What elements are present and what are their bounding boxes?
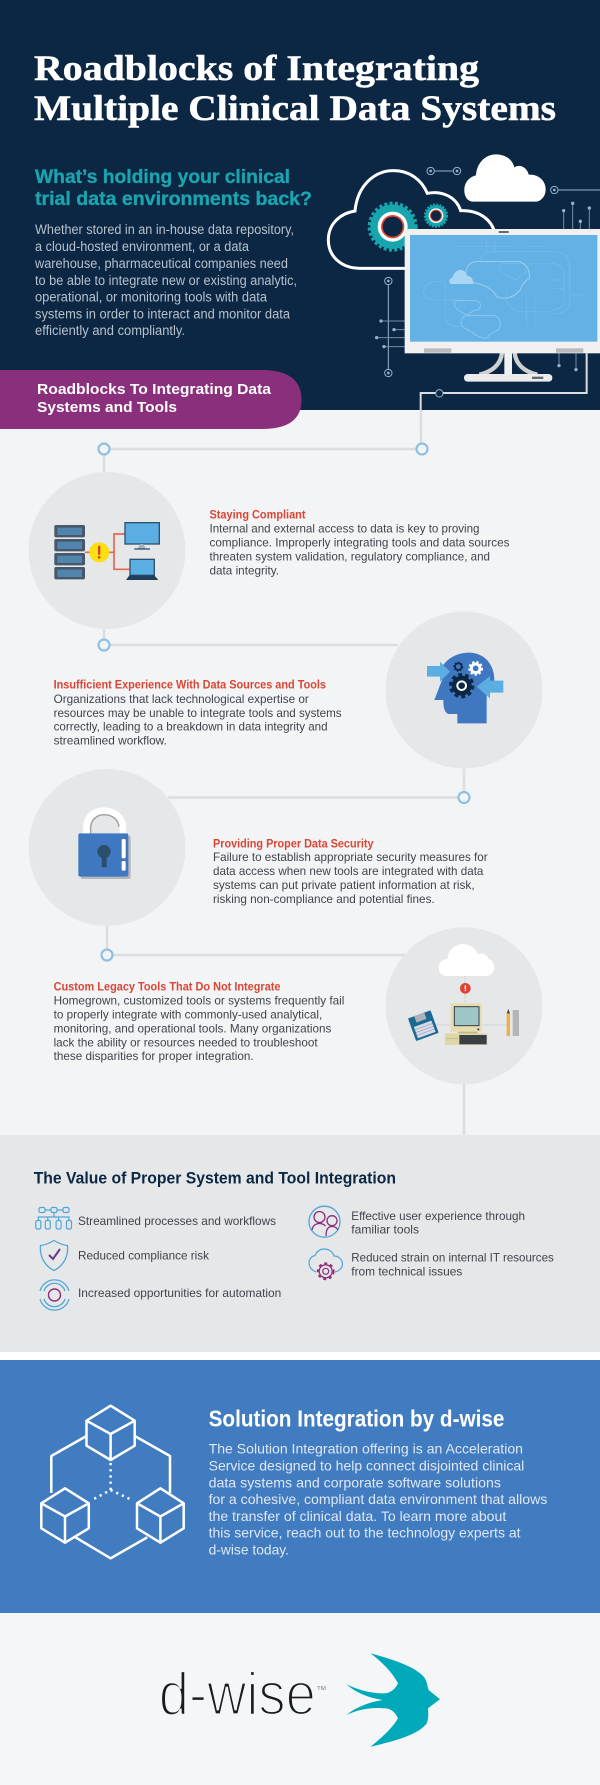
benefit: IT resources: [309, 1249, 554, 1279]
text: staying compliant: Staying Compliant: [210, 507, 306, 521]
benefit: IT resources: Reduced strain on internal IT resources: [351, 1251, 554, 1265]
icon: legacy computer: [408, 944, 519, 1045]
text: legacy tools: monitoring, and operational tools. Many organizations: [54, 1021, 331, 1035]
icon: small gear: [425, 204, 447, 227]
intro paragraph: efficiently and compliantly.: [35, 323, 185, 338]
benefit: compliance risk: [40, 1240, 210, 1270]
text: staying compliant: Internal and external access to data is key to proving: [210, 522, 480, 536]
panel: value section background: [0, 1135, 600, 1352]
banner: roadblocks: [0, 370, 302, 429]
text: legacy tools: these disparities for proper integration.: [54, 1049, 254, 1063]
benefit: user experience: familiar tools: [351, 1223, 419, 1237]
intro paragraph: systems in order to interact and monitor data: [35, 306, 290, 322]
benefit: streamlined processes: Streamlined processes and workflows: [78, 1214, 276, 1228]
text: insufficient experience: streamlined workflow.: [54, 734, 167, 748]
intro paragraph: Whether stored in an in-house data repository,: [35, 222, 294, 237]
title: [34, 48, 556, 128]
icon: people: [309, 1206, 340, 1237]
benefit: streamlined processes: [36, 1208, 276, 1229]
text: solution description: d-wise today.: [209, 1542, 289, 1558]
icon: head with gears: [427, 653, 503, 723]
icon: shield: [40, 1240, 68, 1270]
subheading: What’s holding your clinical: [35, 167, 290, 188]
text: data security: systems can put private patient information at risk,: [213, 878, 475, 892]
text: solution description: The Solution Integration offering is an Acceleration: [209, 1441, 523, 1457]
benefit: compliance risk: Reduced compliance risk: [78, 1249, 210, 1263]
icon: servers and warning: [54, 523, 159, 580]
title: Roadblocks of Integrating: [34, 48, 479, 88]
subheading: trial data environments back?: [35, 189, 312, 210]
benefit: user experience: Effective user experience through: [351, 1209, 525, 1223]
icon: floppy disk: [408, 1010, 439, 1041]
icon: cycle: [40, 1280, 69, 1310]
benefit: IT resources: from technical issues: [351, 1265, 462, 1279]
text: staying compliant: threaten system validation, regulatory compliance, and: [210, 550, 490, 564]
panel: legacy tools circle: [386, 927, 542, 1084]
text: insufficient experience: [54, 678, 342, 748]
text: data security: risking non-compliance and potential fines.: [213, 892, 435, 906]
text: legacy tools: to properly integrate with commonly-used analytical,: [54, 1007, 322, 1021]
text: insufficient experience: Organizations that lack technological expertise or: [54, 692, 309, 706]
logo: d-wise wordmark: d-wise: [159, 1660, 316, 1727]
text: legacy tools: Homegrown, customized tools or systems frequently fail: [54, 993, 344, 1007]
text: solution description: [209, 1441, 547, 1558]
logo: swallow: [346, 1653, 440, 1747]
text: data security: [213, 836, 488, 906]
text: staying compliant: data integrity.: [210, 564, 279, 578]
subheading: [35, 167, 312, 210]
text: staying compliant: compliance. Improperly integrating tools and data sources: [210, 536, 510, 550]
icon: monitor stand: [464, 353, 552, 382]
icon: cloud gear: [309, 1249, 342, 1279]
text: insufficient experience: resources may be unable to integrate tools and systems: [54, 706, 342, 720]
intro paragraph: to be able to integrate new or existing analytic,: [35, 273, 297, 288]
text: solution description: data systems and corporate software solutions: [209, 1474, 501, 1490]
intro paragraph: operational, or monitoring tools with data: [35, 290, 267, 304]
benefit: automation: [40, 1280, 281, 1310]
text: legacy tools: [54, 980, 344, 1063]
circuit lines: [377, 167, 600, 377]
panel: insufficient experience circle: [386, 612, 542, 768]
text: legacy tools: lack the ability or resources needed to troubleshoot: [54, 1035, 318, 1049]
intro paragraph: [34, 222, 297, 338]
heading: solution integration: Solution Integration by d-wise: [209, 1406, 504, 1432]
white gap strip: [0, 1352, 600, 1360]
text: staying compliant: [210, 507, 510, 578]
screen line art: [423, 238, 583, 327]
icon: white cloud: [464, 154, 546, 202]
panel: logo footer background: [0, 1613, 600, 1785]
connector path: [98, 410, 470, 1135]
connector from monitor: [421, 353, 587, 430]
text: solution description: for a cohesive, compliant data environment that allows: [209, 1491, 547, 1507]
icon: monitor: [405, 229, 600, 353]
text: solution description: the transfer of clinical data. To learn more about: [209, 1508, 506, 1524]
icon: outlined cloud: [328, 171, 495, 268]
illustration: cloud and monitor: [328, 154, 600, 430]
text: insufficient experience: correctly, leading to a breakdown in data integrity and: [54, 720, 328, 734]
title: Multiple Clinical Data Systems: [34, 88, 556, 128]
panel: solution background: [0, 1360, 600, 1613]
text: legacy tools: Custom Legacy Tools That Do Not Integrate: [54, 980, 281, 994]
panel: staying compliant circle: [28, 472, 186, 629]
intro paragraph: warehouse, pharmaceutical companies need: [34, 256, 288, 271]
panel: data security circle: [28, 769, 186, 926]
logo: d-wise wordmark: TM: [317, 1686, 326, 1692]
heading: value of integration: The Value of Proper System and Tool Integration: [34, 1168, 396, 1187]
text: data security: data access when new tools are integrated with data: [213, 864, 484, 878]
intro paragraph: a cloud-hosted environment, or a data: [35, 239, 249, 254]
text: data security: Providing Proper Data Security: [213, 836, 374, 850]
text: solution description: this service, reach out to the technology experts at: [209, 1525, 521, 1541]
icon: padlock: [78, 811, 131, 879]
icon: flowchart: [36, 1208, 72, 1229]
banner: roadblocks: Systems and Tools: [37, 399, 177, 416]
icon: large gear: [369, 203, 416, 250]
text: solution description: Service designed to help connect disjointed clinical: [209, 1458, 524, 1474]
icon: connected cubes: [41, 1406, 184, 1558]
text: data security: Failure to establish appropriate security measures for: [213, 850, 488, 864]
text: insufficient experience: Insufficient Experience With Data Sources and Tools: [54, 678, 326, 692]
panel: header background: [0, 0, 600, 410]
banner: roadblocks: Roadblocks To Integrating Data: [37, 381, 272, 398]
benefit: automation: Increased opportunities for automation: [78, 1286, 281, 1300]
benefit: user experience: [309, 1206, 525, 1237]
